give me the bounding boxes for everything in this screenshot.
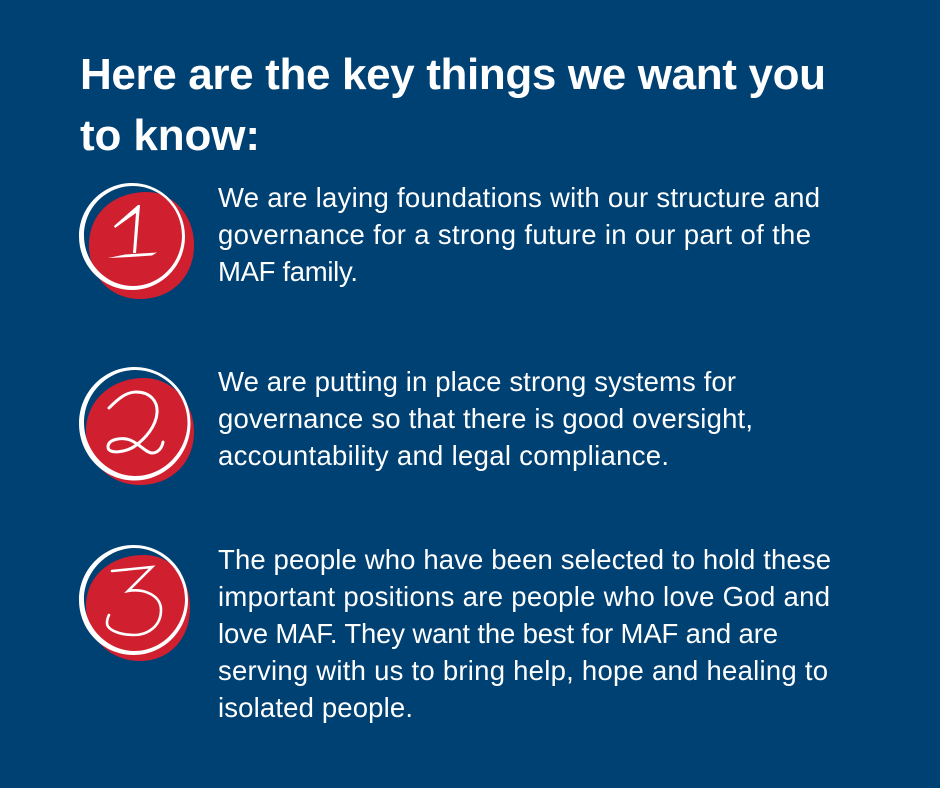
icon: number 1 badge: [79, 183, 194, 299]
text block: point 2: governance so that there is good oversight,: [218, 403, 753, 434]
text block: point 1: MAF family.: [218, 256, 358, 287]
title: to know:: [80, 111, 260, 160]
text block: point 3: The people who have been selected to hold these: [218, 544, 831, 575]
text block: point 2: We are putting in place strong systems for: [218, 366, 736, 397]
icon: number 3 badge: [79, 545, 190, 661]
text block: point 2: accountability and legal compliance.: [218, 440, 669, 471]
text block: point 1: [218, 182, 820, 287]
text block: point 1: We are laying foundations with our structure and: [218, 182, 820, 213]
text block: point 3: serving with us to bring help, hope and healing to: [218, 655, 828, 686]
text block: point 3: [218, 544, 831, 723]
text block: point 3: important positions are people who love God and: [218, 581, 830, 612]
text block: point 1: governance for a strong future in our part of the: [218, 219, 811, 250]
title: Here are the key things we want you: [80, 50, 826, 99]
icon: number 2 badge: [79, 367, 194, 485]
text block: point 3: love MAF. They want the best for MAF and are: [218, 618, 778, 649]
text block: point 3: isolated people.: [218, 692, 413, 723]
title: [80, 50, 826, 160]
text block: point 2: [218, 366, 753, 471]
